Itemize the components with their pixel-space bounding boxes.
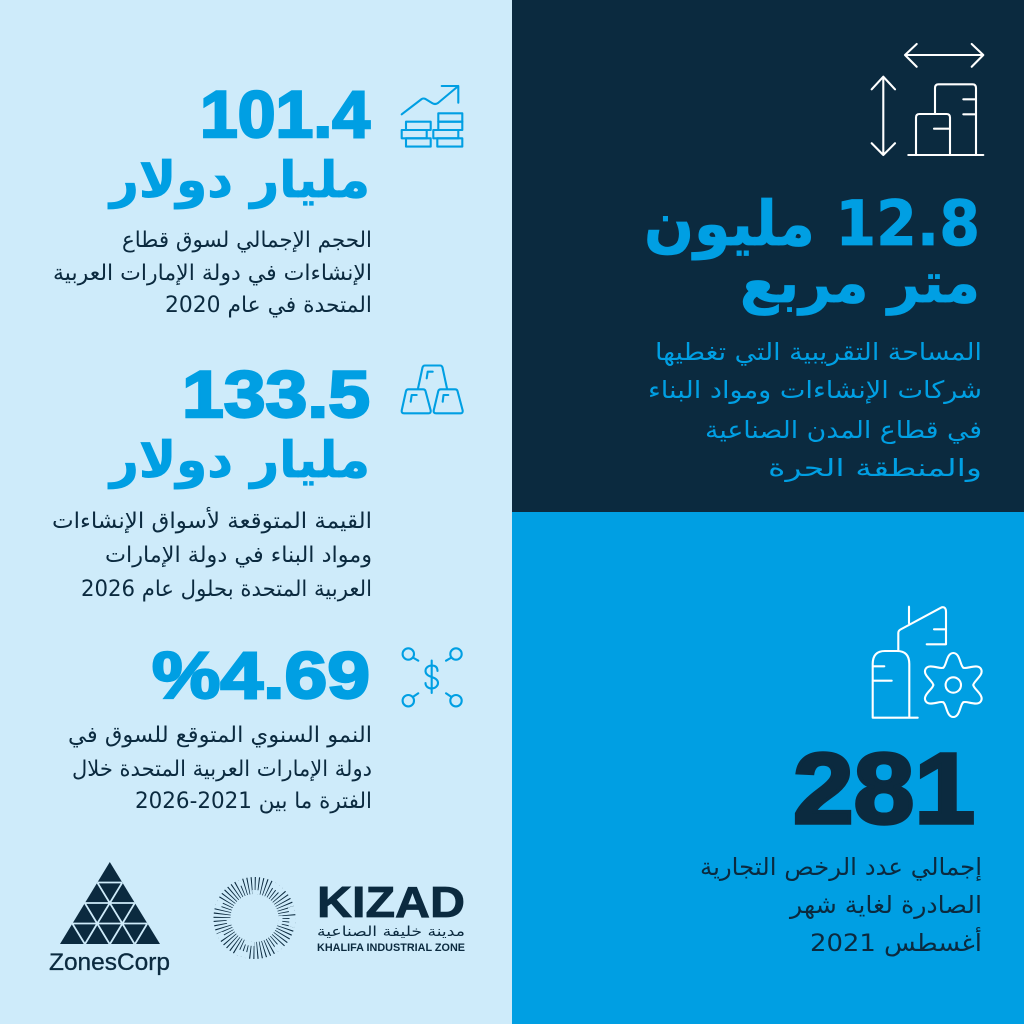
stat block: 4.69 percent growth — [68, 638, 462, 814]
heading: billion dollars: مليار دولار — [107, 151, 370, 210]
logo: KIZAD Khalifa Industrial Zone: مدينة خليفة الصناعية — [317, 924, 465, 940]
logo: ZonesCorp: ZonesCorp — [49, 949, 170, 976]
logo: KIZAD Khalifa Industrial Zone — [216, 878, 465, 956]
icon: dollar sign with network nodes — [403, 648, 462, 706]
number: 4.69 percent: %4.69 — [152, 638, 370, 712]
description: في قطاع المدن الصناعية — [705, 416, 982, 444]
number: 101.4: 101.4 — [200, 77, 370, 151]
panel: left statistics — [0, 0, 512, 1024]
number: 133.5: 133.5 — [182, 357, 370, 431]
icon: factory towers with gear — [873, 607, 986, 718]
logo: KIZAD Khalifa Industrial Zone: KHALIFA INDUSTRIAL ZONE — [317, 942, 465, 954]
panel: covered area — [512, 0, 1024, 512]
description: والمنطقة الحرة — [768, 454, 982, 482]
description: دولة الإمارات العربية المتحدة خلال — [72, 757, 372, 782]
number and heading: 12.8 million: 12.8 مليون — [644, 187, 980, 260]
description: ومواد البناء في دولة الإمارات — [105, 543, 372, 568]
description — [700, 853, 982, 957]
number: 281: 281 — [793, 733, 975, 845]
description: الإنشاءات في دولة الإمارات العربية — [53, 261, 372, 286]
heading: square metres: متر مربع — [740, 251, 980, 316]
description: الفترة ما بين 2021-2026 — [135, 789, 372, 814]
description: شركات الإنشاءات ومواد البناء — [648, 376, 982, 404]
description: القيمة المتوقعة لأسواق الإنشاءات — [52, 507, 372, 534]
panel: trade licences — [512, 512, 1024, 1024]
description: المساحة التقريبية التي تغطيها — [655, 338, 982, 366]
description: إجمالي عدد الرخص التجارية — [700, 853, 982, 882]
description — [52, 507, 372, 602]
icon: rising chart over coin stacks — [402, 86, 462, 147]
logo: ZonesCorp — [49, 862, 170, 976]
description — [68, 723, 372, 814]
description: العربية المتحدة بحلول عام 2026 — [81, 577, 372, 602]
stat block: 133.5 billion dollars — [52, 357, 463, 602]
icon: buildings with dimension arrows — [872, 44, 983, 155]
icon: gold bars — [402, 366, 463, 413]
description — [648, 338, 982, 482]
stat block: 101.4 billion dollars — [53, 77, 462, 318]
description: المتحدة في عام 2020 — [165, 293, 372, 318]
description — [53, 228, 372, 318]
description: النمو السنوي المتوقع للسوق في — [68, 723, 372, 748]
heading: billion dollars: مليار دولار — [107, 431, 370, 490]
description: الصادرة لغاية شهر — [789, 891, 982, 919]
description: الحجم الإجمالي لسوق قطاع — [122, 228, 372, 253]
icon: KIZAD sunburst — [216, 880, 292, 956]
description: أغسطس 2021 — [810, 927, 982, 957]
logo: KIZAD Khalifa Industrial Zone: KIZAD — [317, 878, 465, 927]
